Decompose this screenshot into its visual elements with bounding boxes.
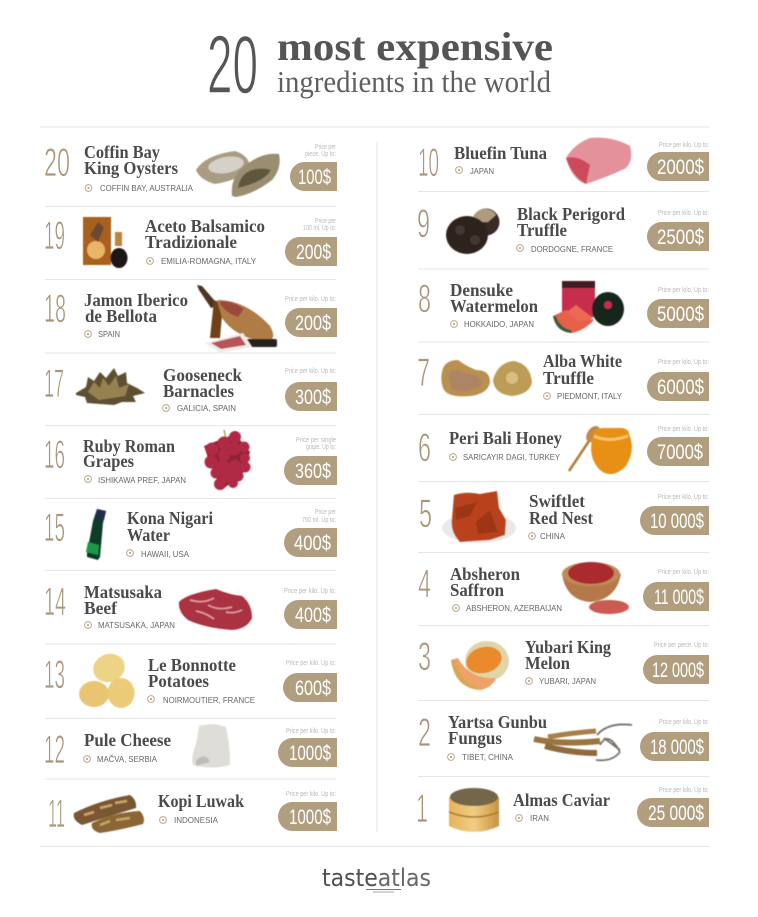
panel: 16 Ruby Roman Grapes: Price per single	[296, 437, 336, 444]
icon: oysters	[196, 151, 280, 197]
icon: saffron bowl	[562, 562, 629, 614]
panel: 14 Matsusaka Beef: 400$	[295, 604, 331, 627]
panel: 14 Matsusaka Beef: Price per kilo. Up to:	[284, 588, 336, 595]
panel: 11 Kopi Luwak: Kopi Luwak	[158, 791, 244, 811]
panel: 3 Yubari King Melon	[418, 635, 709, 690]
panel: 6 Peri Bali Honey: 6	[418, 426, 431, 470]
panel: 16 Ruby Roman Grapes: 360$	[295, 460, 331, 483]
panel: 7 Alba White Truffle: 7	[417, 351, 430, 395]
panel: 6 Peri Bali Honey: SARICAYIR DAGI, TURKEY	[463, 452, 560, 462]
panel: 20 Coffin Bay King Oysters: piece. Up to:	[305, 151, 336, 158]
panel: 13 Le Bonnotte Potatoes: 13	[44, 653, 65, 697]
icon: barnacles	[76, 368, 145, 405]
panel: 3 Yubari King Melon: Price per piece. Up to:	[654, 642, 709, 649]
panel: 13 Le Bonnotte Potatoes	[44, 649, 337, 708]
panel: 11 Kopi Luwak	[48, 791, 337, 836]
panel: 15 Kona Nigari Water: HAWAII, USA	[141, 549, 189, 559]
panel: 18 Jamon Iberico: de Bellota	[85, 306, 157, 326]
panel: 15 Kona Nigari Water: Price per	[315, 509, 336, 516]
panel: 8 Densuke Watermelon: Watermelon	[450, 296, 538, 316]
panel: 7 Alba White Truffle: 6000$	[657, 376, 704, 399]
panel: 20 Coffin Bay King Oysters: 100$	[298, 166, 331, 189]
panel: 19 Aceto Balsamico	[44, 214, 337, 268]
panel: 15 Kona Nigari Water	[44, 506, 337, 560]
icon: cordyceps fungus	[534, 724, 632, 760]
panel: 18 Jamon Iberico: Jamon Iberico	[84, 290, 188, 310]
panel: 19 Aceto Balsamico: 100 ml. Up to:	[303, 225, 336, 232]
icon: swiftlet red nest	[442, 491, 516, 543]
panel: 15 Kona Nigari Water: 15	[44, 506, 65, 550]
panel: 15 Kona Nigari Water: 750 ml. Up to:	[302, 517, 336, 524]
panel: 12 Pule Cheese: Pule Cheese	[84, 730, 171, 750]
panel: 14 Matsusaka Beef: 14	[44, 580, 66, 624]
icon: water bottle	[86, 509, 106, 560]
icon: cheese	[192, 724, 230, 768]
panel: 8 Densuke Watermelon	[418, 277, 709, 333]
panel: 1 Almas Caviar: IRAN	[530, 813, 549, 823]
panel: 1 Almas Caviar: 25 000$	[648, 802, 704, 825]
icon: densuke watermelon	[553, 281, 624, 333]
panel: 20 Coffin Bay King Oysters: Coffin Bay	[84, 142, 160, 162]
panel: 17 Gooseneck Barnacles: 300$	[295, 386, 331, 409]
panel: 11 Kopi Luwak: 11	[48, 792, 65, 836]
panel: 9 Black Perigord Truffle: Truffle	[517, 220, 567, 240]
panel: 14 Matsusaka Beef: Beef	[84, 598, 118, 618]
panel: 17 Gooseneck Barnacles: Gooseneck	[163, 365, 242, 385]
panel: 9 Black Perigord Truffle: DORDOGNE, FRANCE	[531, 244, 613, 254]
panel: 17 Gooseneck Barnacles: Barnacles	[163, 381, 234, 401]
panel: 5 Swiftlet Red Nest: Swiftlet	[529, 491, 585, 511]
panel: 2 Yartsa Gunbu Fungus: 2	[418, 711, 431, 755]
panel: 5 Swiftlet Red Nest: Price per kilo. Up to:	[658, 494, 709, 501]
panel: 14 Matsusaka Beef: Matsusaka	[84, 582, 162, 602]
panel: 7 Alba White Truffle: Alba White	[543, 351, 622, 371]
icon: black truffle	[446, 208, 500, 254]
panel: 19 Aceto Balsamico: 19	[44, 214, 65, 258]
panel: 20 Coffin Bay King Oysters	[44, 141, 337, 197]
icon: kopi luwak droppings	[74, 795, 144, 833]
panel: 17 Gooseneck Barnacles: 17	[44, 362, 64, 406]
panel: 5 Swiftlet Red Nest	[419, 491, 709, 543]
panel: 7 Alba White Truffle	[417, 351, 709, 401]
panel: 10 Bluefin Tuna: 10	[418, 141, 439, 185]
panel: 10 Bluefin Tuna: JAPAN	[470, 166, 494, 176]
panel: 20 Coffin Bay King Oysters: 20	[44, 141, 70, 185]
icon: red grapes	[204, 430, 250, 490]
panel: 3 Yubari King Melon: 3	[418, 635, 431, 679]
panel: 14 Matsusaka Beef: MATSUSAKA, JAPAN	[98, 620, 175, 630]
panel: 17 Gooseneck Barnacles: Price per kilo. Up to:	[285, 368, 336, 375]
panel: 4 Absheron Saffron: 4	[418, 562, 431, 606]
panel: 11 Kopi Luwak: INDONESIA	[174, 815, 218, 825]
panel: 13 Le Bonnotte Potatoes: Price per kilo. Up to:	[286, 660, 336, 667]
panel: 10 Bluefin Tuna: 2000$	[657, 156, 704, 179]
panel: 16 Ruby Roman Grapes: 16	[44, 433, 65, 477]
panel: 4 Absheron Saffron: Saffron	[450, 580, 504, 600]
panel: 19 Aceto Balsamico: Price per	[315, 218, 336, 225]
panel: 7 Alba White Truffle: Price per kilo. Up to:	[658, 359, 709, 366]
panel: 13 Le Bonnotte Potatoes: 600$	[295, 677, 331, 700]
panel: 16 Ruby Roman Grapes: ISHIKAWA PREF, JAPAN	[98, 475, 186, 485]
panel: 10 Bluefin Tuna: Bluefin Tuna	[454, 143, 547, 163]
panel: 4 Absheron Saffron: Absheron	[450, 564, 520, 584]
panel: 8 Densuke Watermelon: Densuke	[450, 280, 513, 300]
panel: 3 Yubari King Melon: Yubari King	[525, 637, 611, 657]
panel: 4 Absheron Saffron: ABSHERON, AZERBAIJAN	[466, 603, 562, 613]
panel: 8 Densuke Watermelon: 5000$	[657, 303, 704, 326]
panel: 6 Peri Bali Honey: 7000$	[657, 441, 703, 464]
panel: 12 Pule Cheese: MAČVA, SERBIA	[97, 754, 157, 764]
panel: 19 Aceto Balsamico: Tradizionale	[145, 232, 237, 252]
icon: tuna	[566, 138, 631, 184]
panel: 3 Yubari King Melon: 12 000$	[652, 659, 704, 682]
panel: 5 Swiftlet Red Nest: CHINA	[540, 531, 565, 541]
icon: wagyu beef	[179, 589, 252, 630]
panel: 2 Yartsa Gunbu Fungus: 18 000$	[650, 736, 704, 759]
panel: 2 Yartsa Gunbu Fungus: TIBET, CHINA	[462, 752, 513, 762]
panel: 9 Black Perigord Truffle: Black Perigord	[517, 204, 625, 224]
panel: 9 Black Perigord Truffle: 2500$	[657, 226, 704, 249]
title	[207, 18, 553, 111]
panel: 9 Black Perigord Truffle	[417, 202, 709, 254]
panel: 12 Pule Cheese	[44, 724, 337, 772]
title: most expensive	[277, 24, 553, 69]
panel: 1 Almas Caviar	[416, 787, 709, 832]
panel: 7 Alba White Truffle: Truffle	[543, 368, 594, 388]
panel: 12 Pule Cheese: 12	[44, 728, 65, 772]
panel: 4 Absheron Saffron	[418, 562, 709, 614]
panel: 8 Densuke Watermelon: 8	[418, 277, 431, 321]
panel: 18 Jamon Iberico: 200$	[295, 312, 331, 335]
panel: 1 Almas Caviar: Price per kilo. Up to:	[659, 787, 709, 794]
panel: 11 Kopi Luwak: 1000$	[289, 806, 331, 829]
panel: 20 Coffin Bay King Oysters: Price per	[315, 144, 336, 151]
panel: 14 Matsusaka Beef	[44, 580, 337, 630]
panel: 15 Kona Nigari Water: 400$	[294, 532, 331, 555]
panel: 5 Swiftlet Red Nest: Red Nest	[529, 508, 593, 528]
panel: 16 Ruby Roman Grapes: Ruby Roman	[83, 436, 175, 456]
panel: 5 Swiftlet Red Nest: 10 000$	[650, 510, 704, 533]
panel: 17 Gooseneck Barnacles	[44, 362, 337, 413]
title: ingredients in the world	[277, 64, 551, 99]
panel: 9 Black Perigord Truffle: 9	[417, 202, 430, 246]
panel: 13 Le Bonnotte Potatoes: NOIRMOUTIER, FRANCE	[163, 695, 255, 705]
panel: 2 Yartsa Gunbu Fungus: Price per kilo. Up to:	[659, 719, 709, 726]
panel: 12 Pule Cheese: Price per kilo. Up to:	[286, 728, 336, 735]
icon: white truffles	[441, 360, 532, 396]
panel: 6 Peri Bali Honey: Peri Bali Honey	[449, 428, 562, 448]
panel: 19 Aceto Balsamico: EMILIA-ROMAGNA, ITALY	[161, 256, 256, 266]
panel: 3 Yubari King Melon: Melon	[525, 653, 570, 673]
panel: 18 Jamon Iberico	[44, 285, 337, 353]
icon: yubari melon	[451, 641, 509, 690]
panel: 10 Bluefin Tuna	[418, 138, 709, 185]
panel: 5 Swiftlet Red Nest: 5	[419, 492, 432, 536]
panel: 8 Densuke Watermelon: HOKKAIDO, JAPAN	[464, 319, 534, 329]
panel: 9 Black Perigord Truffle: Price per kilo. Up to:	[658, 210, 709, 217]
panel: 17 Gooseneck Barnacles: GALICIA, SPAIN	[177, 403, 236, 413]
panel: 2 Yartsa Gunbu Fungus: Fungus	[448, 728, 502, 748]
panel: 6 Peri Bali Honey	[418, 423, 709, 474]
panel: 13 Le Bonnotte Potatoes: Potatoes	[148, 671, 209, 691]
panel: 1 Almas Caviar: Almas Caviar	[513, 790, 610, 810]
panel: 18 Jamon Iberico: Price per kilo. Up to:	[285, 296, 336, 303]
panel: 6 Peri Bali Honey: Price per kilo. Up to:	[658, 426, 709, 433]
panel: 19 Aceto Balsamico: Aceto Balsamico	[145, 216, 265, 236]
panel: 19 Aceto Balsamico: 200$	[296, 241, 331, 264]
panel: 20 Coffin Bay King Oysters: COFFIN BAY, AUSTRALIA	[100, 183, 193, 193]
panel: 4 Absheron Saffron: Price per kilo. Up to:	[658, 569, 709, 576]
title: 20	[207, 18, 258, 111]
panel: 15 Kona Nigari Water: Kona Nigari	[127, 508, 213, 528]
icon: balsamic box and bottle	[83, 217, 128, 268]
panel: 15 Kona Nigari Water: Water	[127, 525, 170, 545]
panel: 4 Absheron Saffron: 11 000$	[654, 586, 704, 609]
panel: 10 Bluefin Tuna: Price per kilo. Up to:	[659, 142, 709, 149]
icon: potatoes	[79, 649, 134, 708]
panel: 12 Pule Cheese: 1000$	[289, 742, 331, 765]
icon: caviar tin	[449, 788, 499, 832]
panel: 20 Coffin Bay King Oysters: King Oysters	[84, 158, 178, 178]
panel: 3 Yubari King Melon: YUBARI, JAPAN	[539, 676, 596, 686]
icon: honey jar and dipper	[569, 423, 632, 474]
panel: 2 Yartsa Gunbu Fungus: Yartsa Gunbu	[448, 712, 547, 732]
panel: 16 Ruby Roman Grapes	[44, 430, 337, 490]
panel: 11 Kopi Luwak: Price per kilo. Up to:	[286, 791, 336, 798]
panel: 13 Le Bonnotte Potatoes: Le Bonnotte	[148, 655, 236, 675]
panel: 7 Alba White Truffle: PIEDMONT, ITALY	[557, 391, 622, 401]
panel: 1 Almas Caviar: 1	[416, 787, 428, 831]
panel: 8 Densuke Watermelon: Price per kilo. Up to:	[658, 287, 709, 294]
panel: 16 Ruby Roman Grapes: Grapes	[83, 451, 134, 471]
icon: jamon on stand	[197, 285, 277, 353]
logo: tasteatlas: tasteatlas	[322, 864, 431, 892]
panel: 2 Yartsa Gunbu Fungus	[418, 711, 709, 762]
panel: 18 Jamon Iberico: 18	[44, 287, 66, 331]
panel: 18 Jamon Iberico: SPAIN	[98, 329, 120, 339]
panel: 16 Ruby Roman Grapes: grape. Up to:	[306, 444, 336, 451]
